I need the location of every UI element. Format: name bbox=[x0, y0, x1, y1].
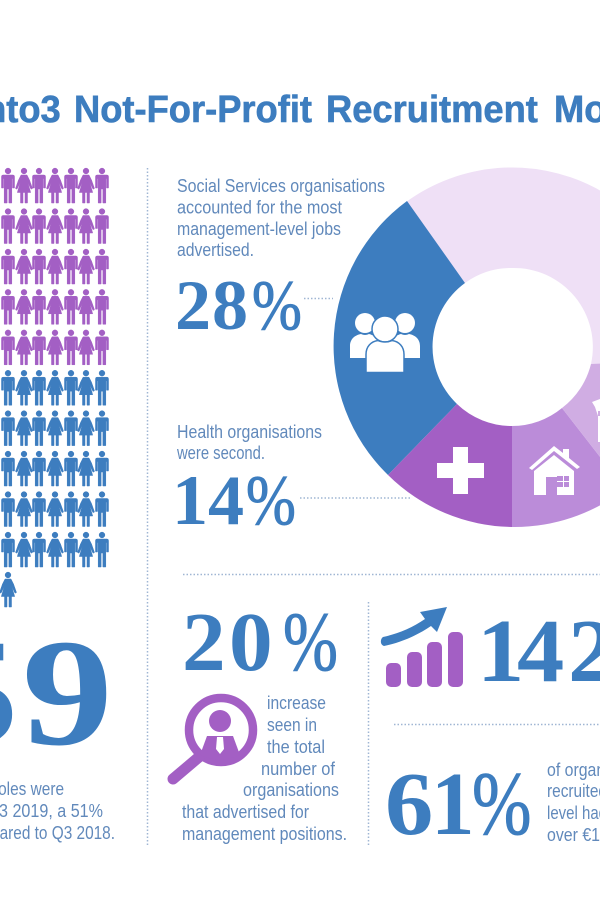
text: health bbox=[176, 422, 322, 463]
icon: magnifier with person bbox=[173, 698, 253, 779]
text: 20% description: organisations bbox=[243, 780, 339, 800]
text: 20% description: that advertised for bbox=[182, 802, 309, 822]
text: social services: Social Services organisations bbox=[177, 176, 385, 196]
stat: 61% bbox=[385, 753, 531, 854]
text: 20% description: number of bbox=[261, 759, 336, 779]
text: social services: management-level jobs bbox=[177, 219, 341, 239]
big number: roles: 9 bbox=[22, 608, 113, 778]
stat: 20%: 2 bbox=[182, 597, 226, 689]
text: roles description bbox=[0, 779, 115, 843]
text: 20% description: management positions. bbox=[182, 824, 347, 844]
stat: 142: 4 bbox=[517, 601, 564, 701]
text: roles description: 3 2019, a 51% bbox=[0, 801, 103, 821]
icon: house bbox=[529, 446, 580, 495]
title bbox=[0, 87, 600, 130]
stat: 14%: 4 bbox=[208, 462, 244, 540]
title: Recruitment bbox=[326, 87, 538, 130]
stat: 20%: 0 bbox=[229, 597, 273, 689]
donut chart bbox=[334, 167, 600, 527]
stat: 20%: % bbox=[283, 597, 338, 689]
stat: 28% bbox=[175, 267, 302, 345]
text: health: Health organisations bbox=[177, 422, 322, 442]
stat: 14%: % bbox=[246, 463, 296, 540]
stat: 14%: 1 bbox=[172, 462, 208, 540]
pictogram: people grid bbox=[0, 168, 108, 607]
stat: 142: 1 bbox=[477, 601, 524, 701]
stat: 28%: % bbox=[252, 268, 302, 345]
text: 20% description: increase bbox=[267, 693, 326, 713]
stat: 28%: 8 bbox=[212, 267, 248, 345]
stat: 28%: 2 bbox=[175, 267, 211, 345]
stat: 14% bbox=[172, 462, 296, 540]
text: 61% description bbox=[547, 760, 600, 845]
icon: cross bbox=[437, 447, 484, 494]
text: social services: accounted for the most bbox=[177, 198, 342, 218]
text: health: were second. bbox=[176, 443, 265, 463]
icon: people bbox=[350, 313, 420, 372]
text: social services: advertised. bbox=[177, 240, 254, 260]
text: 20% description bbox=[182, 693, 347, 844]
title: Not-For-Profit bbox=[74, 87, 312, 130]
text: 20% description: the total bbox=[267, 737, 325, 757]
stat: 61%: 1 bbox=[431, 755, 475, 854]
icon: rising bar chart with arrow bbox=[381, 607, 463, 687]
stat: 142 bbox=[477, 601, 600, 701]
text: social services bbox=[177, 176, 385, 260]
stat: 61%: 6 bbox=[385, 755, 433, 854]
text: 20% description: seen in bbox=[267, 715, 317, 735]
stat: 61%: % bbox=[472, 753, 531, 854]
stat: 20% bbox=[182, 597, 338, 689]
icon: star fragment bbox=[592, 399, 600, 442]
